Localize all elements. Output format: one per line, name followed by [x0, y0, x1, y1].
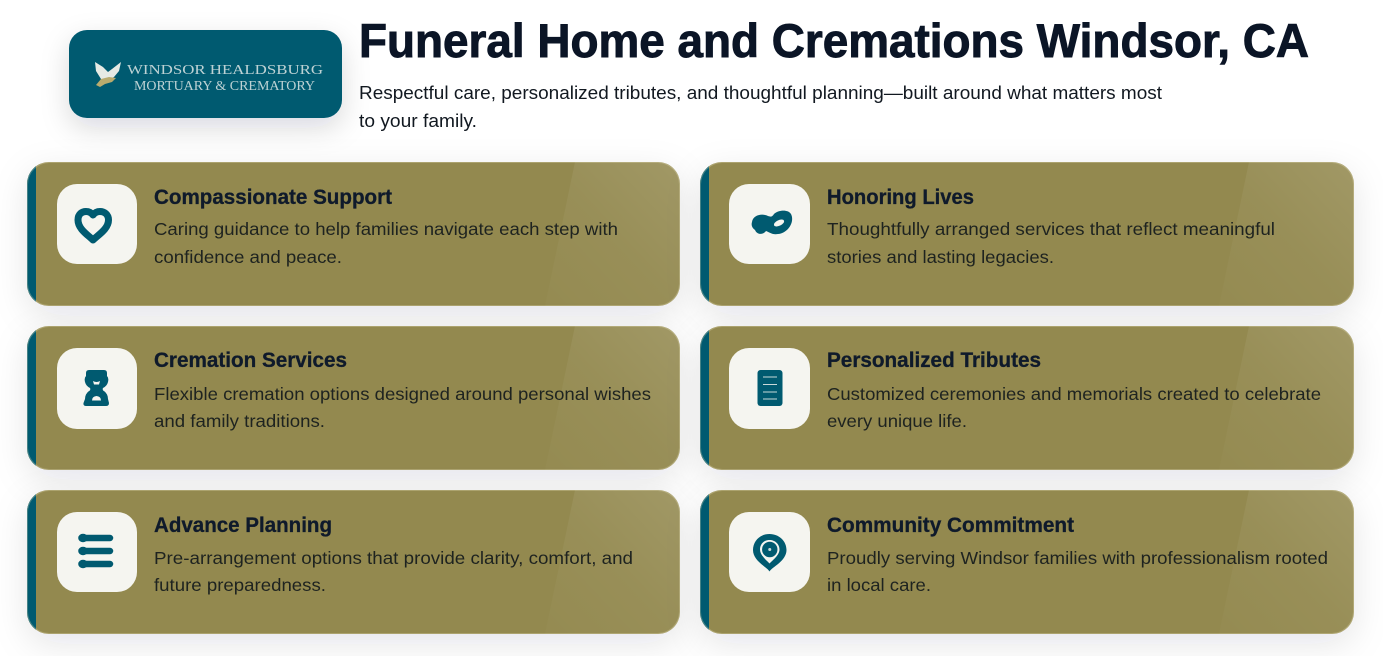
icon tile: [729, 184, 810, 264]
text block: [827, 384, 1321, 431]
text block: [154, 219, 618, 267]
icon: map pin: [753, 534, 786, 572]
title: Funeral Home and Cremations Windsor, CA: [359, 14, 1309, 67]
logo text: MORTUARY & CREMATORY: [134, 79, 315, 94]
heading: Advance Planning: [154, 514, 332, 537]
subtitle: [359, 83, 1162, 131]
text block: Pre-arrangement options that provide clarity, comfort, and: [154, 548, 633, 568]
icon: hourglass: [83, 370, 109, 406]
logo text: WINDSOR HEALDSBURG: [127, 63, 323, 78]
subtitle: to your family.: [359, 111, 477, 131]
icon tile: [57, 512, 137, 592]
icon: document: [758, 370, 782, 406]
logo text: [127, 63, 323, 94]
icon tile: [57, 184, 137, 264]
text block: stories and lasting legacies.: [827, 247, 1054, 267]
text block: Flexible cremation options designed around personal wishes: [154, 384, 651, 404]
text block: in local care.: [827, 575, 931, 595]
text block: and family traditions.: [154, 411, 325, 431]
panel: Community Commitment: [700, 490, 1354, 634]
text block: [154, 548, 633, 595]
text block: [827, 219, 1275, 267]
heading: Personalized Tributes: [827, 349, 1041, 372]
icon tile: [57, 348, 137, 429]
heading: Compassionate Support: [154, 186, 392, 209]
heading: Cremation Services: [154, 349, 347, 372]
logo badge: [69, 30, 342, 118]
panel: Cremation Services: [27, 326, 680, 470]
heading: Community Commitment: [827, 514, 1074, 537]
text block: Caring guidance to help families navigate each step with: [154, 219, 618, 239]
icon tile: [729, 348, 810, 429]
icon: dove: [95, 62, 121, 87]
icon: heart: [78, 212, 108, 240]
text block: every unique life.: [827, 411, 967, 431]
text block: Customized ceremonies and memorials created to celebrate: [827, 384, 1321, 404]
text block: [154, 384, 651, 431]
text block: Proudly serving Windsor families with professionalism rooted: [827, 548, 1328, 568]
text block: Thoughtfully arranged services that reflect meaningful: [827, 219, 1275, 239]
icon: checklist: [78, 534, 110, 568]
subtitle: Respectful care, personalized tributes, and thoughtful planning—built around what matters most: [359, 83, 1162, 103]
text block: confidence and peace.: [154, 247, 342, 267]
icon: ribbon: [752, 211, 792, 234]
panel: Advance Planning: [27, 490, 680, 634]
text block: future preparedness.: [154, 575, 326, 595]
panel: Compassionate Support: [27, 162, 680, 306]
text block: [827, 548, 1328, 595]
panel: Personalized Tributes: [700, 326, 1354, 470]
icon tile: [729, 512, 810, 592]
panel: Honoring Lives: [700, 162, 1354, 306]
heading: Honoring Lives: [827, 186, 974, 209]
